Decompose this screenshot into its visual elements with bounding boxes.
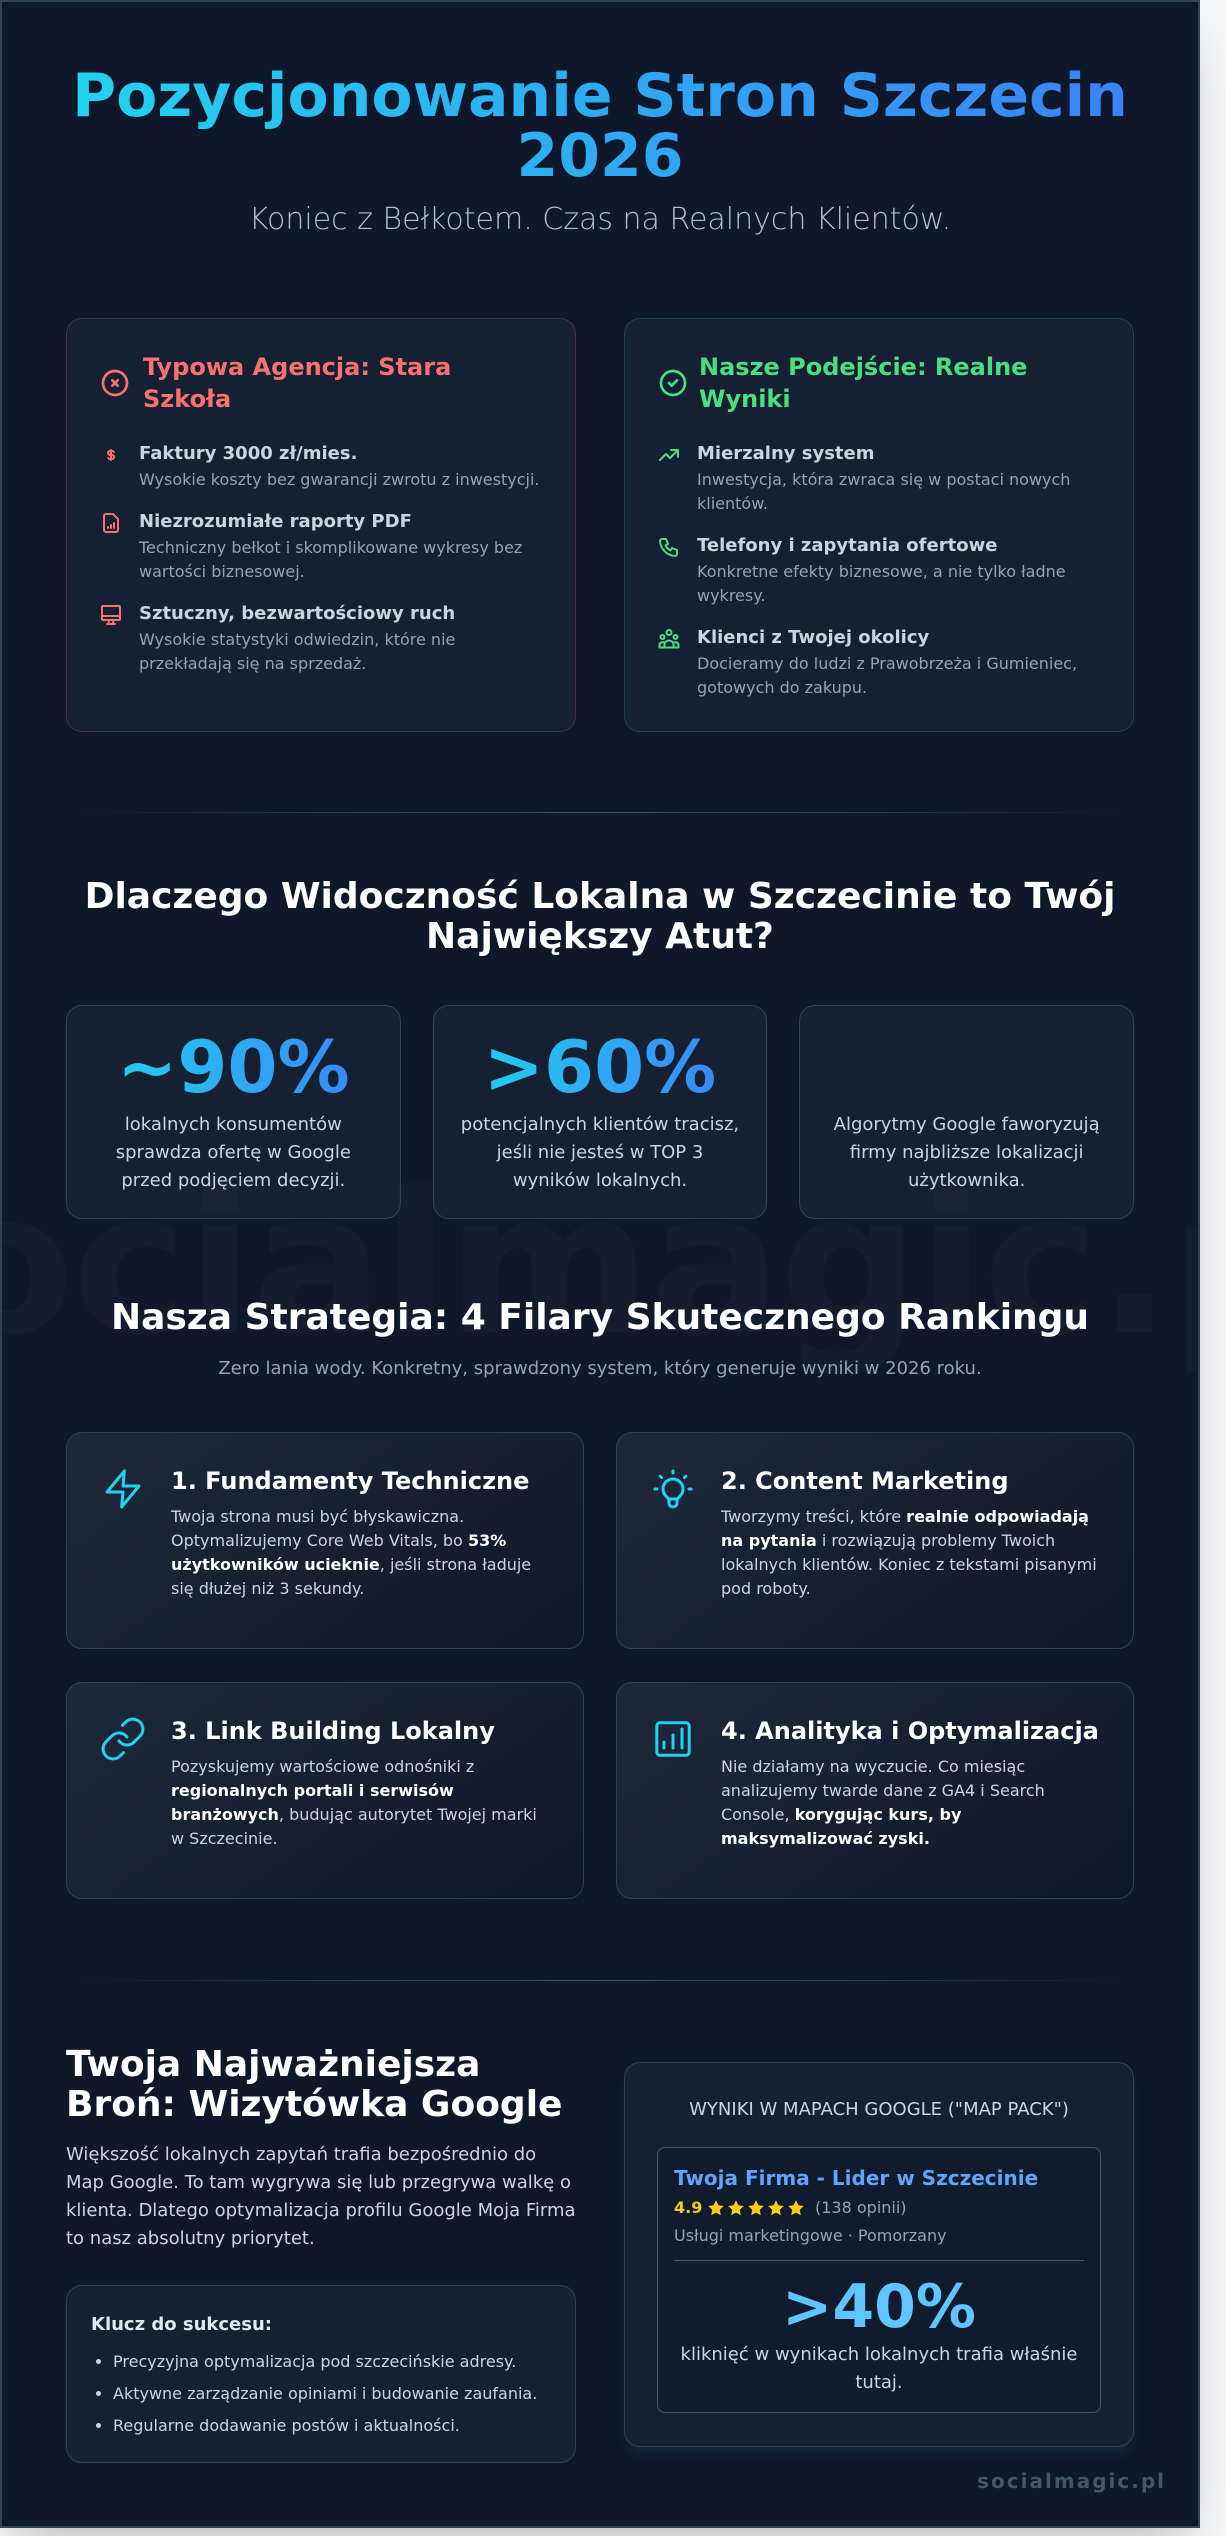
pillar heading: 2. Content Marketing <box>721 1467 1008 1495</box>
icon: link <box>102 1718 144 1760</box>
stat description: wyników lokalnych. <box>513 1170 687 1191</box>
pillar text: Pozyskujemy wartościowe odnośniki z <box>171 1757 474 1776</box>
item: local clients: gotowych do zakupu. <box>697 678 867 697</box>
item: reports: Techniczny bełkot i skomplikowane wykresy bez <box>139 538 522 557</box>
icon: light bulb <box>654 1470 692 1508</box>
title: Pozycjonowanie Stron Szczecin <box>72 61 1128 131</box>
pillar text: Nie działamy na wyczucie. Co miesiąc <box>721 1757 1025 1776</box>
item: artificial traffic <box>101 603 455 673</box>
section heading: local visibility: Największy Atut? <box>426 916 774 957</box>
rating row: (138 opinii) <box>815 2198 907 2217</box>
item: phone calls: Konkretne efekty biznesowe, a nie tylko ładne <box>697 562 1066 581</box>
stat description: kliknięć w wynikach lokalnych trafia właśnie <box>681 2344 1077 2365</box>
pillar text: Twoja strona musi być błyskawiczna. <box>171 1507 464 1526</box>
item: artificial traffic: Sztuczny, bezwartościowy ruch <box>139 603 455 624</box>
bullet list: Precyzyjna optymalizacja pod szczecińskie adresy. <box>113 2352 516 2371</box>
pillar 2 <box>616 1432 1134 1649</box>
title: 2026 <box>516 121 684 191</box>
section subheading: Zero lania wody. Konkretny, sprawdzony system, który generuje wyniki w 2026 roku. <box>218 1358 982 1379</box>
item: measurable system: klientów. <box>697 494 768 513</box>
item: measurable system: Mierzalny system <box>697 443 875 464</box>
pillar text: maksymalizować zyski. <box>721 1829 930 1848</box>
pillar text: branżowych, budując autorytet Twojej marki <box>171 1805 537 1824</box>
pillar text: lokalnych klientów. Koniec z tekstami pisanymi <box>721 1555 1097 1574</box>
stat description: sprawdza ofertę w Google <box>116 1142 351 1163</box>
stat description: użytkownika. <box>908 1170 1025 1191</box>
icon: analytics chart <box>655 1721 691 1757</box>
stat description <box>681 2344 1077 2393</box>
pillar heading: 3. Link Building Lokalny <box>171 1717 495 1745</box>
stat description <box>461 1114 739 1191</box>
item: invoices: Faktury 3000 zł/mies. <box>139 443 357 464</box>
item: invoices: Wysokie koszty bez gwarancji zwrotu z inwestycji. <box>139 470 540 489</box>
stat description <box>116 1114 351 1191</box>
footer brand: socialmagic.pl <box>977 2469 1166 2493</box>
item: local clients: Klienci z Twojej okolicy <box>697 627 929 648</box>
bullet list: Regularne dodawanie postów i aktualności. <box>113 2416 460 2435</box>
stat description: potencjalnych klientów tracisz, <box>461 1114 739 1135</box>
panel: keys to success <box>66 2285 576 2463</box>
stat card: proximity <box>799 1005 1134 1219</box>
intro paragraph: klienta. Dlatego optymalizacja profilu Google Moja Firma <box>66 2200 576 2221</box>
section heading: Google Business Profile: Broń: Wizytówka Google <box>66 2084 562 2125</box>
stat description: przed podjęciem decyzji. <box>121 1170 345 1191</box>
stat description: Algorytmy Google faworyzują <box>834 1114 1100 1135</box>
pillar text: Tworzymy treści, które realnie odpowiadają <box>721 1507 1089 1526</box>
pillar text: Optymalizujemy Core Web Vitals, bo 53% <box>171 1531 506 1550</box>
pillar text <box>171 1757 537 1848</box>
item: measurable system <box>659 443 1070 513</box>
icon: lightning bolt <box>106 1469 140 1509</box>
pillar text: analizujemy twarde dane z GA4 i Search <box>721 1781 1045 1800</box>
stat card: 60% <box>433 1005 767 1219</box>
pillar heading: 4. Analityka i Optymalizacja <box>721 1717 1099 1745</box>
pillar text <box>720 1507 1097 1598</box>
item: reports: Niezrozumiałe raporty PDF <box>139 511 412 532</box>
rating row <box>674 2198 907 2217</box>
intro paragraph <box>66 2144 576 2249</box>
pillar 4 <box>616 1682 1134 1899</box>
stat description: firmy najbliższe lokalizacji <box>850 1142 1084 1163</box>
panel heading: our approach: Wyniki <box>699 385 791 413</box>
pillar text: na pytania i rozwiązują problemy Twoich <box>721 1531 1055 1550</box>
stat value: >40% <box>782 2272 976 2342</box>
intro paragraph: Większość lokalnych zapytań trafia bezpośrednio do <box>66 2144 536 2165</box>
rating row: 4.9 <box>674 2198 702 2217</box>
item: measurable system: Inwestycja, która zwraca się w postaci nowych <box>697 470 1070 489</box>
item: reports: wartości biznesowej. <box>139 562 305 581</box>
bullet list: Aktywne zarządzanie opiniami i budowanie zaufania. <box>113 2384 537 2403</box>
section heading: local visibility: Dlaczego Widoczność Lokalna w Szczecinie to Twój <box>85 876 1115 917</box>
pillar 3 <box>66 1682 584 1899</box>
item: artificial traffic: Wysokie statystyki odwiedzin, które nie <box>139 630 455 649</box>
section heading: Google Business Profile <box>66 2044 562 2125</box>
panel heading: typical agency: Typowa Agencja: Stara <box>143 353 451 381</box>
section heading: strategy: Nasza Strategia: 4 Filary Skutecznego Rankingu <box>111 1297 1089 1338</box>
stat description: tutaj. <box>855 2372 903 2393</box>
panel heading: our approach: Nasze Podejście: Realne <box>699 353 1027 381</box>
business name: Twoja Firma - Lider w Szczecinie <box>674 2166 1038 2190</box>
panel heading: typical agency: Szkoła <box>143 385 231 413</box>
item: phone calls: Telefony i zapytania ofertowe <box>697 535 997 556</box>
stat card: 90% <box>66 1005 401 1219</box>
panel: typical agency <box>66 318 576 732</box>
item: phone calls: wykresy. <box>697 586 766 605</box>
subtitle: Koniec z Bełkotem. Czas na Realnych Klientów. <box>249 202 951 237</box>
pillar text: regionalnych portali i serwisów <box>171 1781 454 1800</box>
pillar text: Console, korygując kurs, by <box>721 1805 961 1824</box>
business category: Usługi marketingowe · Pomorzany <box>674 2226 947 2245</box>
panel: our approach <box>624 318 1134 732</box>
pillar text <box>170 1507 531 1598</box>
pillar text: w Szczecinie. <box>171 1829 278 1848</box>
stat description <box>834 1114 1100 1191</box>
pillar text <box>721 1757 1045 1848</box>
section heading: Google Business Profile: Twoja Najważniejsza <box>66 2044 480 2085</box>
stat value: >60% <box>484 1025 716 1109</box>
bullet list <box>96 2352 537 2435</box>
intro paragraph: Map Google. To tam wygrywa się lub przegrywa walkę o <box>66 2172 571 2193</box>
item: local clients: Docieramy do ludzi z Prawobrzeża i Gumieniec, <box>697 654 1077 673</box>
panel: map pack <box>624 2062 1134 2447</box>
item: phone calls <box>659 535 1066 605</box>
pillar text: użytkowników ucieknie, jeśli strona ładuje <box>171 1555 531 1574</box>
stat description: lokalnych konsumentów <box>125 1114 342 1135</box>
panel heading: WYNIKI W MAPACH GOOGLE ("MAP PACK") <box>689 2099 1069 2120</box>
pillar heading: 1. Fundamenty Techniczne <box>171 1467 529 1495</box>
item: local clients <box>658 627 1077 697</box>
listing card <box>657 2147 1101 2413</box>
intro paragraph: to nasz absolutny priorytet. <box>66 2228 315 2249</box>
pillar text: się dłużej niż 3 sekundy. <box>171 1579 364 1598</box>
pillar text: pod roboty. <box>721 1579 811 1598</box>
pillar 1 <box>66 1432 584 1649</box>
section heading: local visibility <box>85 876 1115 957</box>
panel heading: our approach <box>660 353 1027 413</box>
item: invoices <box>107 443 540 489</box>
panel heading: typical agency <box>102 353 451 413</box>
stat description: jeśli nie jesteś w TOP 3 <box>497 1142 703 1163</box>
stat value: ~90% <box>117 1025 350 1109</box>
item: reports <box>103 511 522 581</box>
panel heading: Klucz do sukcesu: <box>91 2314 272 2335</box>
title <box>66 66 1134 186</box>
item: artificial traffic: przekładają się na sprzedaż. <box>139 654 366 673</box>
